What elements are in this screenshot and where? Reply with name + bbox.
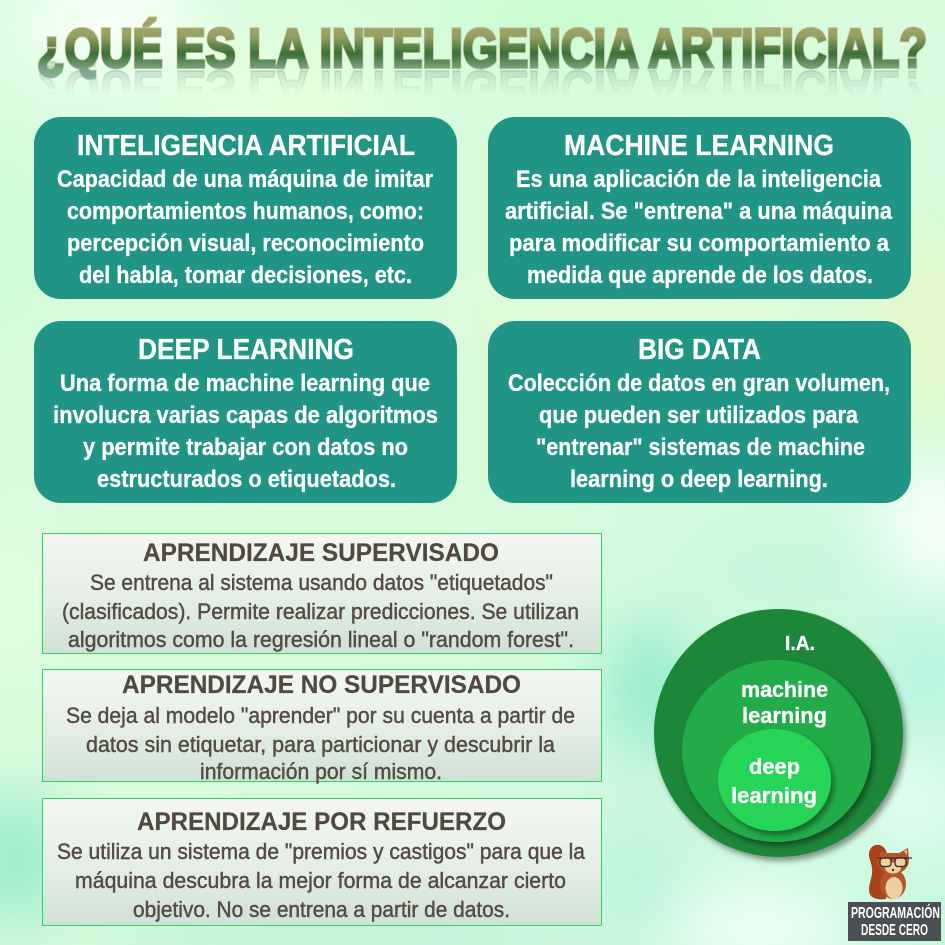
body: aprendizaje por refuerzo: Se utiliza un sistema de "premios y castigos" para que la — [57, 839, 586, 864]
body: aprendizaje no supervisado: datos sin etiquetar, para particionar y descubrir la — [86, 732, 556, 757]
body: aprendizaje no supervisado: Se deja al modelo "aprender" por su cuenta a partir de — [66, 703, 575, 728]
body: inteligencia artificial: comportamientos humanos, como: — [67, 198, 424, 225]
heading: deep learning: DEEP LEARNING — [138, 334, 354, 366]
circle: deep learning: deep — [749, 754, 800, 779]
body: machine learning: para modificar su comportamiento a — [509, 230, 890, 257]
heading: big data: BIG DATA — [638, 334, 761, 366]
panel: machine learning — [488, 117, 911, 299]
logo: programación desde cero label — [848, 902, 941, 941]
heading: aprendizaje supervisado: APRENDIZAJE SUPERVISADO — [143, 539, 499, 567]
body: aprendizaje supervisado: algoritmos como la regresión lineal o "random forest". — [68, 627, 574, 652]
body: aprendizaje supervisado — [62, 570, 579, 652]
body: big data: "entrenar" sistemas de machine — [536, 434, 865, 461]
body: deep learning: involucra varias capas de algoritmos — [53, 402, 438, 429]
circle: I.A.: I.A. — [785, 633, 815, 655]
body: aprendizaje no supervisado: información por sí mismo. — [200, 759, 442, 784]
body — [880, 869, 906, 899]
logo: squirrel mascot — [869, 845, 912, 899]
body: deep learning — [53, 370, 438, 493]
head — [877, 848, 909, 874]
body: machine learning: Es una aplicación de la inteligencia — [516, 166, 882, 193]
heading: machine learning: MACHINE LEARNING — [564, 130, 834, 162]
circle: deep learning: learning — [731, 783, 817, 808]
panel: aprendizaje no supervisado — [42, 670, 602, 784]
body: aprendizaje supervisado: (clasificados). Permite realizar predicciones. Se utilizan — [62, 599, 579, 624]
nose — [892, 869, 894, 871]
body: big data: Colección de datos en gran volumen, — [508, 370, 890, 397]
heading: inteligencia artificial: INTELIGENCIA ARTIFICIAL — [77, 130, 415, 162]
body: big data: learning o deep learning. — [570, 466, 828, 493]
circle: machine learning — [682, 660, 871, 842]
circle: deep learning — [718, 729, 831, 831]
circle: machine learning: machine — [741, 677, 828, 702]
panel: aprendizaje supervisado — [42, 534, 602, 654]
body: big data — [508, 370, 890, 493]
body: aprendizaje por refuerzo — [57, 839, 586, 922]
panel: aprendizaje por refuerzo — [42, 798, 602, 926]
body: aprendizaje por refuerzo: máquina descubra la mejor forma de alcanzar cierto — [75, 868, 566, 893]
body: deep learning: estructurados o etiquetados. — [97, 466, 396, 493]
body: big data: que pueden ser utilizados para — [539, 402, 859, 429]
body: machine learning: artificial. Se "entrena" a una máquina — [505, 198, 893, 225]
title — [37, 17, 927, 121]
panel: inteligencia artificial — [34, 117, 457, 299]
body: inteligencia artificial: del habla, tomar decisiones, etc. — [79, 262, 412, 289]
body: inteligencia artificial: Capacidad de una máquina de imitar — [57, 166, 433, 193]
panel: big data — [488, 321, 911, 503]
body: inteligencia artificial: percepción visual, reconocimiento — [67, 230, 424, 257]
body: inteligencia artificial — [57, 166, 433, 289]
body: deep learning: y permite trabajar con datos no — [83, 434, 408, 461]
body: aprendizaje por refuerzo: objetivo. No se entrena a partir de datos. — [133, 897, 510, 922]
body: aprendizaje no supervisado — [66, 703, 575, 784]
body: aprendizaje supervisado: Se entrena al sistema usando datos "etiquetados" — [90, 570, 553, 595]
glasses — [877, 858, 912, 866]
panel: deep learning — [34, 321, 457, 503]
body: machine learning: medida que aprende de los datos. — [527, 262, 873, 289]
heading: aprendizaje no supervisado: APRENDIZAJE NO SUPERVISADO — [122, 671, 521, 699]
circle: machine learning: learning — [742, 703, 827, 728]
body: deep learning: Una forma de machine learning que — [60, 370, 430, 397]
nested circles diagram — [654, 609, 903, 857]
heading: aprendizaje por refuerzo: APRENDIZAJE POR REFUERZO — [137, 808, 506, 836]
body: machine learning — [505, 166, 893, 289]
tail — [869, 845, 888, 899]
circle: I.A. — [654, 609, 903, 857]
